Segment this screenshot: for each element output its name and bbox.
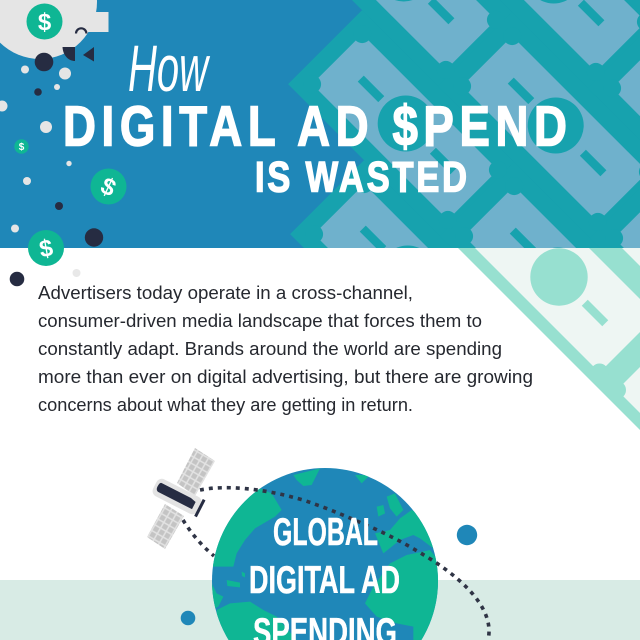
intro paragraph: constantly adapt. Brands around the world are spending	[38, 339, 502, 359]
falling coins and dots: $	[96, 172, 120, 203]
title: How	[128, 31, 211, 105]
falling coins and dots: $	[19, 142, 25, 153]
globe	[210, 468, 443, 640]
intro paragraph: Advertisers today operate in a cross-channel,	[38, 283, 413, 303]
title: DIGITAL AD $PEND	[63, 94, 567, 158]
dotted orbit	[183, 488, 489, 640]
bottom band	[0, 580, 640, 640]
icon: piggy bank	[0, 0, 108, 62]
header background	[0, 0, 640, 248]
globe heading: DIGITAL AD	[249, 559, 400, 602]
satellite	[147, 448, 215, 549]
icon: piggy bank: $	[38, 9, 52, 36]
pale money bill below the header	[458, 248, 640, 430]
globe heading	[249, 511, 400, 640]
intro paragraph: consumer-driven media landscape that forces them to	[38, 311, 482, 331]
title: IS WASTED	[255, 154, 467, 201]
falling coins and dots	[0, 53, 126, 286]
intro paragraph: concerns about what they are getting in return.	[38, 395, 413, 415]
intro paragraph: more than ever on digital advertising, but there are growing	[38, 367, 533, 387]
decorative planets	[181, 525, 477, 625]
intro paragraph	[38, 283, 533, 415]
title	[63, 31, 567, 201]
money bill pattern	[288, 0, 640, 248]
falling coins and dots: $	[37, 234, 56, 263]
globe heading: GLOBAL	[273, 511, 378, 554]
